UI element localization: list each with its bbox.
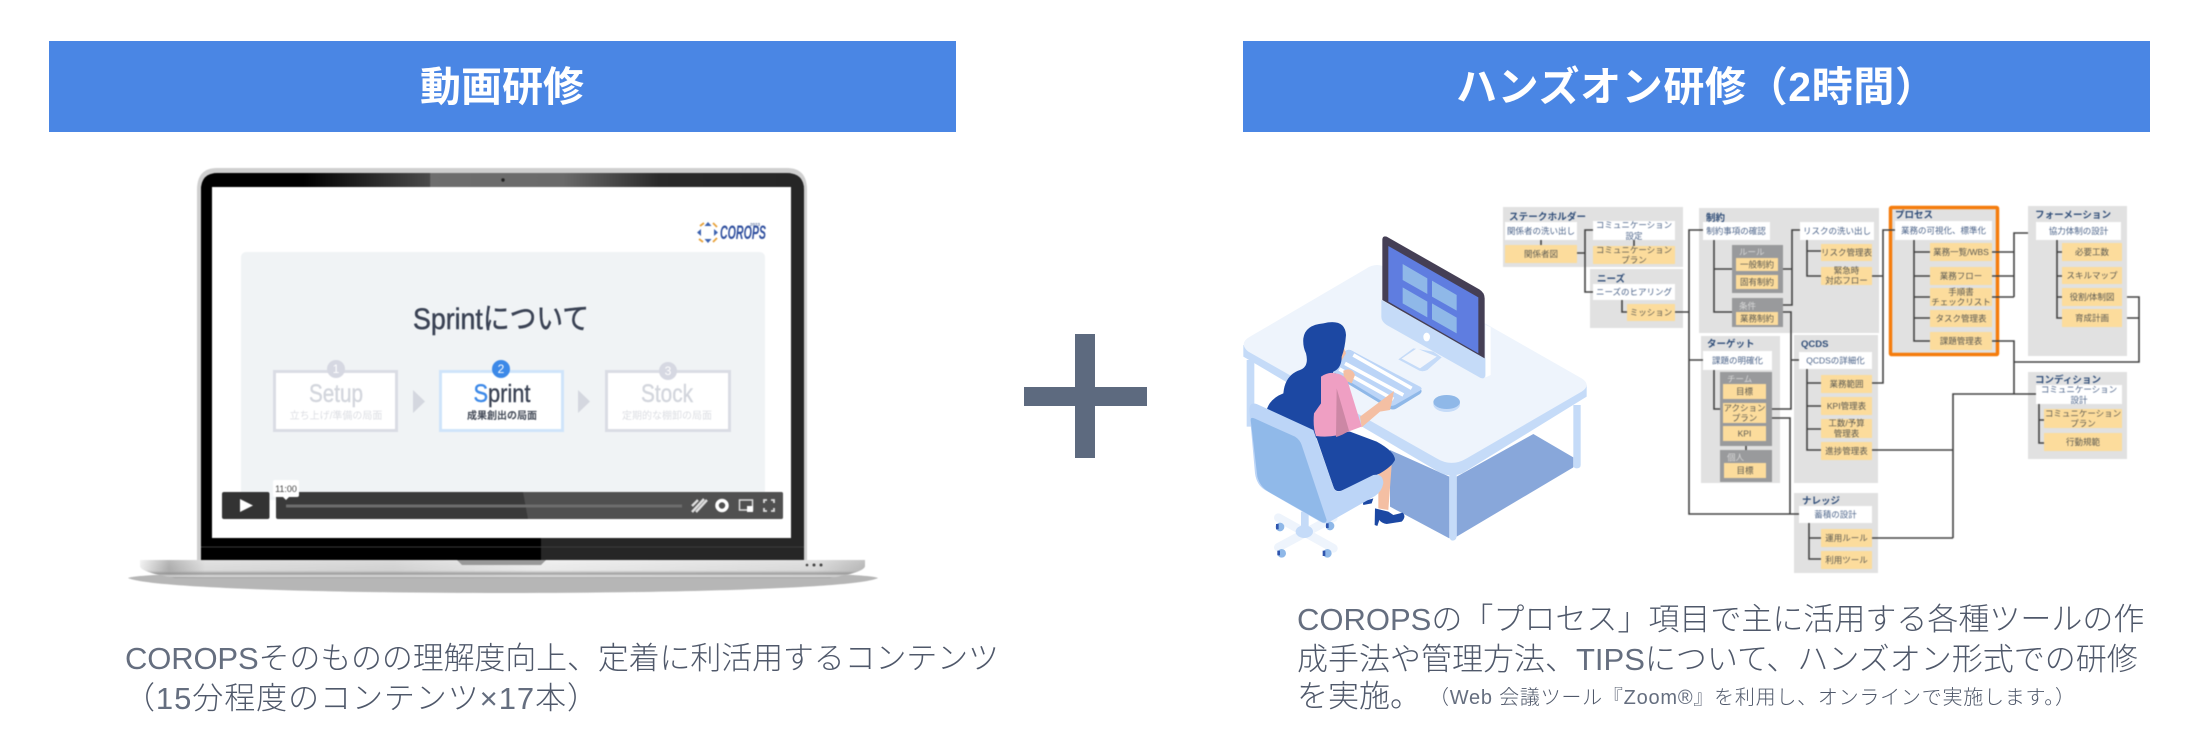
- panel: ターゲット: 課題の明確化: [1712, 356, 1763, 366]
- panel: コンディション: [2028, 372, 2127, 459]
- panel: 制約: 一般制約: [1740, 260, 1774, 270]
- panel: ナレッジ: 運用ルール: [1825, 533, 1868, 543]
- panel: プロセス (highlighted): プロセス: [1895, 210, 1933, 221]
- woman: [1267, 322, 1404, 526]
- panel: コンディション: プラン: [2070, 418, 2096, 428]
- monitor: [1381, 236, 1491, 378]
- icon: plus sign: [1024, 334, 1147, 458]
- panel: フォーメーション: [2028, 206, 2127, 356]
- step: Sprint: 2: [498, 362, 505, 376]
- panel: プロセス (highlighted): 業務一覧/WBS: [1933, 247, 1989, 257]
- text: hands-on training description: （Web 会議ツール『Zoom®』を利用し、オンラインで実施します。）: [1429, 686, 2075, 709]
- laptop shadow: [128, 570, 878, 593]
- mouse: [1433, 395, 1460, 412]
- text: hands-on training description: [1297, 602, 2144, 714]
- slide title: Sprintについて: [413, 303, 589, 336]
- panel: 制約: 業務制約: [1740, 314, 1774, 324]
- panel: ターゲット: チーム: [1727, 374, 1752, 384]
- panel: ニーズ: ニーズ: [1597, 273, 1626, 285]
- panel: QCDS: QCDS: [1801, 339, 1828, 350]
- panel: 制約: 条件: [1739, 301, 1757, 311]
- panel: ステークホルダー: プラン: [1621, 255, 1647, 265]
- panel: フォーメーション: スキルマップ: [2066, 270, 2118, 280]
- step: Stock: 3: [665, 364, 672, 378]
- video controls: [222, 492, 783, 519]
- step: Stock: 定期的な棚卸の局面: [622, 409, 712, 422]
- panel: フォーメーション: 必要工数: [2075, 247, 2109, 257]
- panel: ターゲット: 目標: [1736, 466, 1754, 476]
- step: Sprint: Sprint: [474, 380, 531, 408]
- laptop base: [140, 560, 865, 578]
- panel: ニーズ: ニーズのヒアリング: [1596, 287, 1673, 297]
- panel: フォーメーション: フォーメーション: [2035, 210, 2111, 221]
- panel: QCDS: 進捗管理表: [1825, 446, 1868, 456]
- step: Stock: Stock: [641, 380, 693, 408]
- chart: COROPS flow diagram: [1503, 206, 2139, 573]
- panel: コンディション: 行動規範: [2066, 437, 2100, 447]
- time tooltip: 11:00: [275, 484, 297, 494]
- icon: COROPS logo: [697, 222, 766, 244]
- icon: laptop with video player: [128, 168, 878, 593]
- step: Setup: 1: [333, 362, 340, 376]
- panel: ステークホルダー: ステークホルダー: [1509, 211, 1586, 223]
- panel: QCDS: 管理表: [1834, 428, 1860, 438]
- panel: 制約: 固有制約: [1740, 277, 1774, 287]
- panel: 制約: ルール: [1739, 247, 1765, 257]
- icon: fullscreen: [764, 500, 774, 511]
- panel: プロセス (highlighted): 業務の可視化、標準化: [1901, 226, 1986, 236]
- keyboard: [1333, 350, 1422, 409]
- panel: 制約: 緊急時: [1834, 266, 1860, 276]
- panel: 制約: リスクの洗い出し: [1803, 226, 1871, 236]
- text: hands-on training description: 成手法や管理方法、TIPSについて、ハンズオン形式での研修: [1297, 642, 2138, 677]
- text: hands-on training description: COROPSの「プロセス」項目で主に活用する各種ツールの作: [1297, 602, 2144, 637]
- text: video training description: （15分程度のコンテンツ×17本）: [124, 681, 598, 716]
- panel: ナレッジ: [1794, 493, 1878, 573]
- panel: ステークホルダー: コミュニケーション: [1596, 245, 1672, 255]
- icon: picture in picture: [740, 500, 753, 512]
- heading: ハンズオン研修: ハンズオン研修（2時間）: [1456, 64, 1936, 110]
- desk: [1243, 265, 1587, 541]
- panel: プロセス (highlighted): 業務フロー: [1940, 271, 1982, 281]
- panel: プロセス (highlighted): チェックリスト: [1931, 297, 1991, 307]
- arrow: [413, 390, 425, 413]
- step: Setup: [274, 360, 396, 430]
- panel: 制約: 制約: [1706, 212, 1726, 224]
- panel: コンディション: コンディション: [2035, 374, 2101, 386]
- panel: 制約: 対応フロー: [1825, 276, 1868, 286]
- laptop screen: [212, 187, 791, 538]
- panel: ターゲット: [1701, 336, 1780, 483]
- panel: 制約: 制約事項の確認: [1706, 226, 1766, 236]
- icon: settings: [717, 500, 727, 510]
- panel: プロセス (highlighted): タスク管理表: [1935, 314, 1987, 324]
- panel: フォーメーション: 協力体制の設計: [2049, 226, 2109, 236]
- laptop lid: [197, 168, 807, 562]
- chair: [1249, 403, 1383, 523]
- panel: 制約: [1699, 208, 1879, 333]
- step: Sprint: [440, 360, 562, 430]
- icon: COROPS logo: COROPS: [720, 223, 766, 244]
- panel: ターゲット: KPI: [1738, 428, 1751, 438]
- panel: プロセス (highlighted): 手順書: [1948, 287, 1974, 297]
- panel: ニーズ: ミッション: [1630, 308, 1672, 318]
- time tooltip: [273, 480, 299, 500]
- panel: QCDS: 工数/予算: [1828, 418, 1865, 428]
- text: hands-on training description: を実施。: [1297, 679, 1421, 714]
- panel: ステークホルダー: 関係者の洗い出し: [1507, 226, 1575, 236]
- panel: ステークホルダー: [1503, 207, 1683, 267]
- icon: mute: [692, 499, 707, 512]
- panel: ターゲット: プラン: [1732, 413, 1757, 423]
- step: Sprint: 成果創出の局面: [467, 409, 537, 422]
- heading: 動画研修: 動画研修: [420, 64, 584, 110]
- panel: QCDS: QCDSの詳細化: [1806, 356, 1865, 366]
- panel: フォーメーション: 育成計画: [2075, 313, 2109, 323]
- text: video training description: COROPSそのものの理解度向上、定着に利活用するコンテンツ: [125, 641, 999, 676]
- panel: ステークホルダー: 関係者図: [1524, 249, 1558, 259]
- panel: QCDS: KPI管理表: [1827, 401, 1867, 411]
- heading: ハンズオン研修: [1243, 41, 2150, 132]
- panel: フォーメーション: 役割/体制図: [2070, 292, 2114, 302]
- panel: QCDS: 業務範囲: [1829, 379, 1864, 389]
- arrow: [578, 390, 590, 413]
- panel: ステークホルダー: 設定: [1625, 231, 1643, 241]
- chair base: [1276, 512, 1334, 558]
- panel: ターゲット: ターゲット: [1707, 338, 1755, 350]
- panel: コンディション: コミュニケーション: [2041, 384, 2117, 394]
- panel: ナレッジ: 利用ツール: [1825, 555, 1868, 565]
- panel: ニーズ: [1590, 269, 1683, 328]
- slide panel: [241, 252, 765, 500]
- panel: プロセス (highlighted): [1890, 208, 1998, 354]
- step: Setup: 立ち上げ/準備の局面: [290, 409, 382, 422]
- panel: ナレッジ: ナレッジ: [1802, 496, 1841, 507]
- illustration: woman at desk: [1243, 236, 1587, 558]
- connector lines: [1541, 230, 2139, 559]
- panel: プロセス (highlighted): 課題管理表: [1940, 336, 1983, 346]
- panel: ステークホルダー: コミュニケーション: [1596, 220, 1672, 230]
- panel: コンディション: コミュニケーション: [2045, 408, 2121, 418]
- text: video training description: [124, 641, 999, 716]
- panel: 制約: リスク管理表: [1821, 248, 1872, 258]
- icon: COROPS logo: 2023: [750, 222, 761, 227]
- panel: ターゲット: 目標: [1736, 386, 1753, 396]
- panel: コンディション: 設計: [2070, 395, 2088, 405]
- step: Setup: Setup: [309, 380, 363, 408]
- panel: ターゲット: 個人: [1727, 452, 1745, 462]
- heading: 動画研修: [49, 41, 956, 132]
- panel: ターゲット: アクション: [1723, 403, 1766, 413]
- panel: QCDS: [1794, 335, 1878, 483]
- panel: ナレッジ: 蓄積の設計: [1814, 510, 1857, 520]
- step: Stock: [606, 362, 730, 430]
